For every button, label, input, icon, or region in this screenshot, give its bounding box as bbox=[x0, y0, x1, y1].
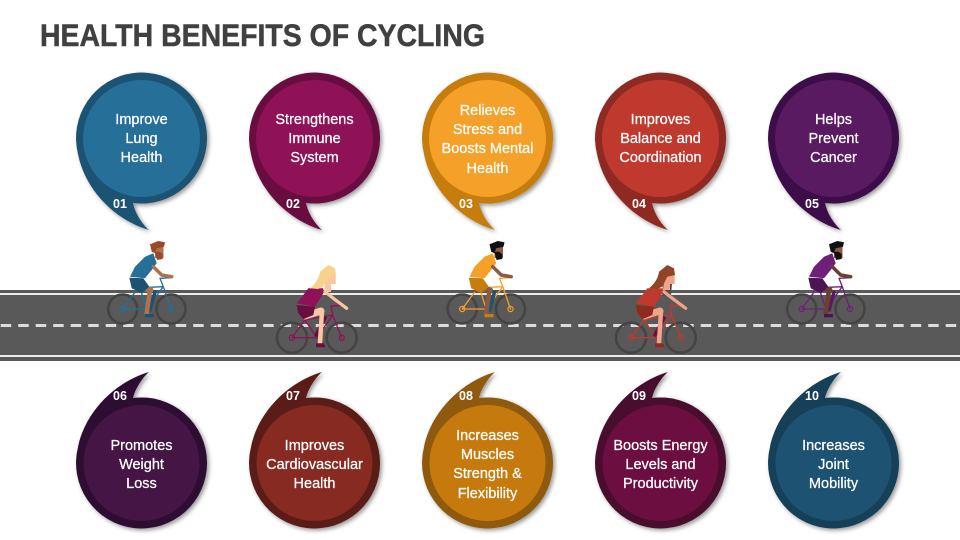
bubble 10: Increases Joint Mobility: Joint bbox=[818, 457, 849, 473]
bubble 08: Increases Muscles Strength & Flexibility bbox=[422, 372, 553, 528]
cyclist 3: orange jersey bbox=[448, 241, 525, 324]
road bbox=[0, 290, 960, 361]
bubble 08: Increases Muscles Strength & Flexibility: Strength & bbox=[453, 466, 522, 482]
bubble 04: Improves Balance and Coordination bbox=[595, 73, 726, 230]
bubble 08: Increases Muscles Strength & Flexibility: Increases bbox=[456, 428, 519, 444]
bubble 07: Improves Cardiovascular Health: Improves bbox=[285, 438, 344, 454]
bubble 02: Strengthens Immune System: System bbox=[290, 150, 339, 166]
bubble 01: Improve Lung Health: 01 bbox=[113, 197, 127, 211]
bubble 03: Relieves Stress and Boosts Mental Health bbox=[422, 73, 553, 230]
bubble 03: Relieves Stress and Boosts Mental Health: Stress and bbox=[453, 122, 522, 138]
bubble 02: Strengthens Immune System: Immune bbox=[288, 131, 341, 147]
bubble 05: Helps Prevent Cancer: 05 bbox=[805, 197, 819, 211]
bubble 02: Strengthens Immune System bbox=[249, 73, 380, 230]
bubble 01: Improve Lung Health: Lung bbox=[125, 131, 158, 147]
cyclist 1: blue jersey bbox=[108, 241, 186, 324]
bubble 09: Boosts Energy Levels and Productivity bbox=[595, 372, 726, 528]
bubble 08: Increases Muscles Strength & Flexibility: Muscles bbox=[461, 447, 514, 463]
cyclist 2: magenta jersey bbox=[277, 265, 357, 353]
bubble 08: Increases Muscles Strength & Flexibility: Flexibility bbox=[458, 486, 518, 502]
bubble 10: Increases Joint Mobility: Mobility bbox=[809, 476, 859, 492]
bubble 10: Increases Joint Mobility bbox=[768, 372, 899, 528]
bubble 05: Helps Prevent Cancer: Cancer bbox=[810, 150, 857, 166]
bubble 09: Boosts Energy Levels and Productivity: Productivity bbox=[623, 476, 699, 492]
bubble 01: Improve Lung Health: Health bbox=[121, 150, 162, 166]
bubble 07: Improves Cardiovascular Health: 07 bbox=[286, 389, 300, 403]
bubble 09: Boosts Energy Levels and Productivity: 09 bbox=[632, 389, 646, 403]
bubble 06: Promotes Weight Loss: 06 bbox=[113, 389, 127, 403]
cyclist 4: red jersey bbox=[616, 265, 696, 353]
bubble 10: Increases Joint Mobility: Increases bbox=[802, 438, 865, 454]
bubble 03: Relieves Stress and Boosts Mental Health: Relieves bbox=[460, 103, 515, 119]
bubble 07: Improves Cardiovascular Health: Health bbox=[294, 476, 335, 492]
bubble 03: Relieves Stress and Boosts Mental Health: 03 bbox=[459, 197, 473, 211]
bubble 05: Helps Prevent Cancer: Prevent bbox=[809, 131, 858, 147]
bubble 04: Improves Balance and Coordination: Coordination bbox=[619, 150, 702, 166]
bubble 03: Relieves Stress and Boosts Mental Health: Boosts Mental bbox=[442, 141, 533, 157]
bubble 07: Improves Cardiovascular Health: Cardiovascular bbox=[266, 457, 363, 473]
bubble 03: Relieves Stress and Boosts Mental Health: Health bbox=[467, 161, 508, 177]
bubble 04: Improves Balance and Coordination: Balance and bbox=[620, 131, 701, 147]
bubble 06: Promotes Weight Loss: Loss bbox=[126, 476, 157, 492]
bubble 09: Boosts Energy Levels and Productivity: Boosts Energy bbox=[613, 438, 708, 454]
bubble 04: Improves Balance and Coordination: Improves bbox=[631, 112, 690, 128]
bubble 06: Promotes Weight Loss: Promotes bbox=[110, 438, 173, 454]
bubble 01: Improve Lung Health bbox=[76, 73, 207, 230]
bubble 02: Strengthens Immune System: Strengthens bbox=[275, 112, 354, 128]
bubble 07: Improves Cardiovascular Health bbox=[249, 372, 380, 528]
cyclist 5: purple jersey bbox=[787, 241, 864, 324]
bubble 01: Improve Lung Health: Improve bbox=[115, 112, 168, 128]
bubble 05: Helps Prevent Cancer bbox=[768, 73, 899, 230]
bubble 06: Promotes Weight Loss bbox=[76, 372, 207, 528]
bubble 09: Boosts Energy Levels and Productivity: Levels and bbox=[625, 457, 696, 473]
bubble 04: Improves Balance and Coordination: 04 bbox=[632, 197, 646, 211]
title: HEALTH BENEFITS OF CYCLING bbox=[40, 17, 485, 53]
bubble 05: Helps Prevent Cancer: Helps bbox=[815, 112, 852, 128]
bubble 10: Increases Joint Mobility: 10 bbox=[805, 389, 819, 403]
bubble 02: Strengthens Immune System: 02 bbox=[286, 197, 300, 211]
bubble 06: Promotes Weight Loss: Weight bbox=[119, 457, 164, 473]
bubble 08: Increases Muscles Strength & Flexibility: 08 bbox=[459, 389, 473, 403]
